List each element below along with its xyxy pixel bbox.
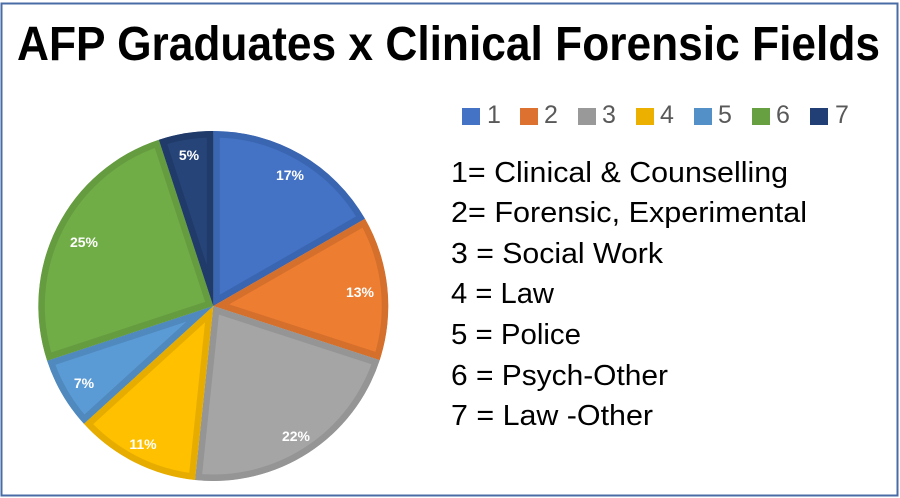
legend item 2: 2 — [544, 101, 558, 129]
legend item 1 — [462, 101, 501, 129]
slice 6: 25% — [38, 140, 213, 361]
legend item 2 — [520, 101, 558, 129]
key line 5: 5 = Police — [451, 319, 581, 351]
legend item 4 — [636, 101, 674, 129]
key line 4: 4 = Law — [451, 278, 555, 310]
legend item 5 — [694, 101, 732, 129]
slice 7: 5% — [159, 131, 213, 306]
legend item 4: 4 — [660, 101, 674, 129]
pie percentage labels: 17% — [276, 167, 305, 183]
legend item 7 — [810, 101, 849, 129]
category key — [451, 157, 807, 432]
legend swatches and numbers — [462, 101, 849, 129]
legend item 7: 7 — [835, 101, 849, 129]
slice 5: 7% — [47, 306, 213, 424]
pie percentage labels: 22% — [282, 428, 311, 444]
slice 3: 22% — [195, 306, 380, 481]
pie percentage labels: 25% — [70, 234, 99, 250]
key line 6: 6 = Psych-Other — [451, 360, 668, 392]
legend item 3 — [578, 101, 616, 129]
pie chart — [38, 131, 388, 481]
key line 3: 3 = Social Work — [451, 238, 664, 270]
key line 1: 1= Clinical & Counselling — [451, 157, 788, 189]
pie percentage labels: 11% — [129, 436, 157, 452]
key line 7: 7 = Law -Other — [451, 400, 653, 432]
key line 2: 2= Forensic, Experimental — [451, 197, 807, 229]
legend item 6: 6 — [776, 101, 790, 129]
pie percentage labels — [70, 147, 375, 452]
pie percentage labels: 7% — [74, 375, 95, 391]
legend item 3: 3 — [602, 101, 616, 129]
pie percentage labels: 13% — [346, 284, 375, 300]
pie percentage labels: 5% — [179, 147, 200, 163]
slice 4: 11% — [84, 306, 213, 480]
legend item 1: 1 — [487, 101, 501, 129]
legend item 6 — [752, 101, 790, 129]
slice 1: 17% — [213, 131, 365, 306]
slice 2: 13% — [213, 219, 388, 360]
legend item 5: 5 — [718, 101, 732, 129]
